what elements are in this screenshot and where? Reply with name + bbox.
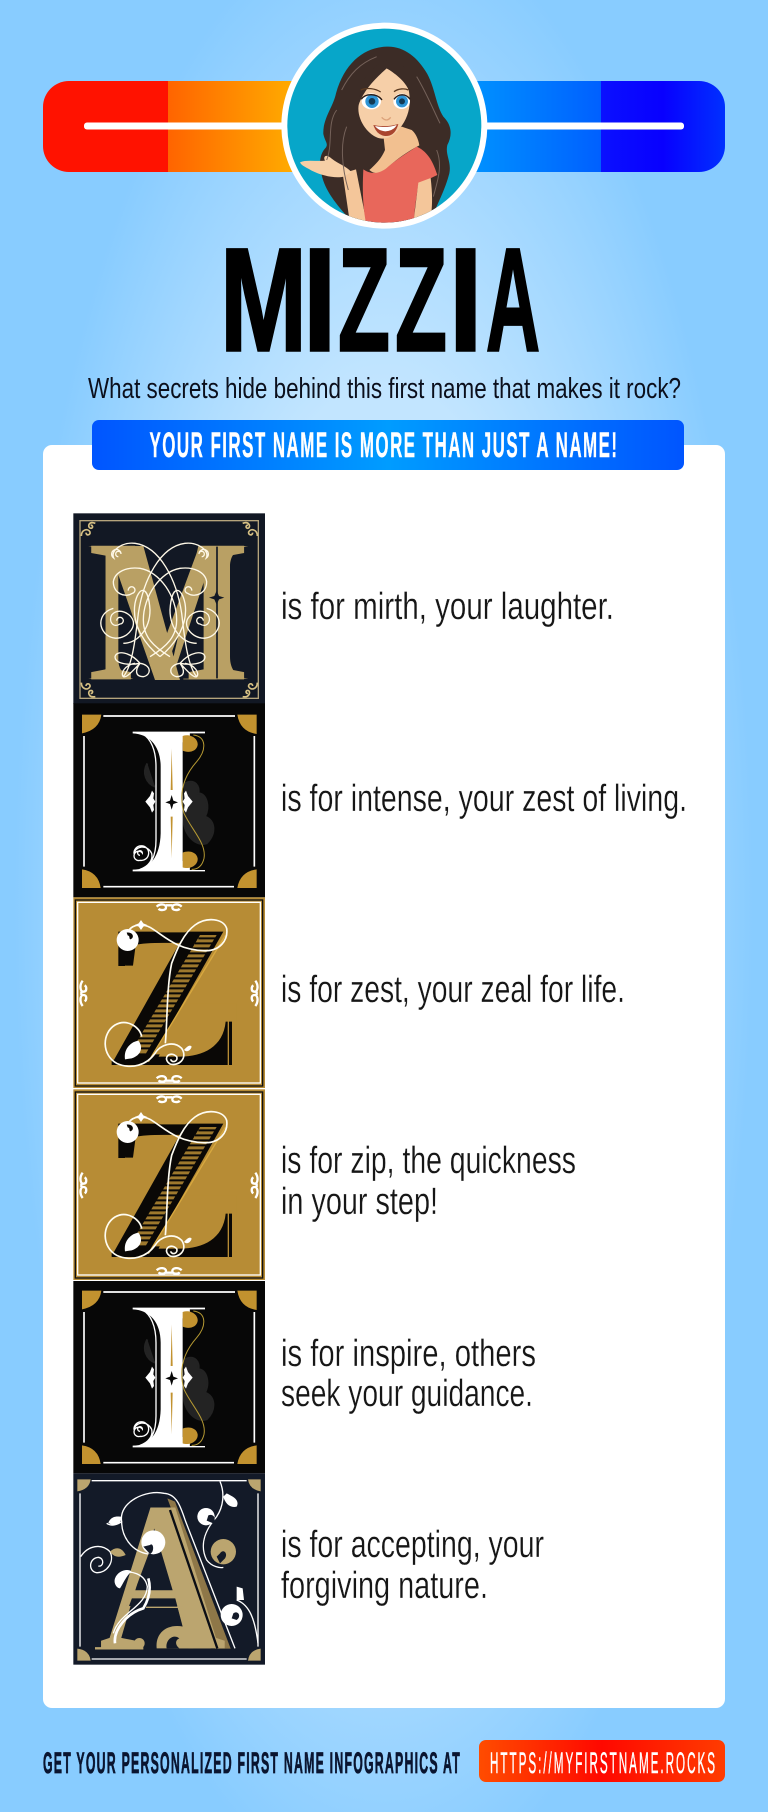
row 6 text: forgiving nature. (281, 1565, 488, 1607)
tile: letter M: M (88, 498, 249, 724)
title: MIZZIA: A (486, 218, 540, 382)
row 6 text (281, 1524, 544, 1607)
tile: letter I (second): I (150, 1259, 194, 1493)
row 4 text (281, 1140, 576, 1223)
row 5 text: is for inspire, others (281, 1333, 536, 1375)
row 4 text: in your step! (281, 1181, 438, 1223)
top colour bar (43, 81, 725, 172)
title: MIZZIA (220, 218, 540, 382)
row 6 text: is for accepting, your (281, 1524, 544, 1566)
title: MIZZIA: I (449, 218, 483, 382)
banner (92, 420, 684, 470)
footer url button (479, 1740, 725, 1782)
title: MIZZIA: M (220, 218, 307, 382)
tile: letter Z: Z (111, 885, 232, 1109)
row 4 text: is for zip, the quickness (281, 1140, 576, 1182)
row 5 text (281, 1333, 536, 1415)
title: MIZZIA: Z (395, 218, 447, 382)
tile: letter Z (second): Z (111, 1077, 232, 1301)
title: MIZZIA: I (303, 218, 337, 382)
row 3 text: is for zest, your zeal for life. (281, 969, 625, 1011)
tile: letter I (73, 683, 265, 917)
tile: letter A: A (99, 1459, 226, 1695)
portrait avatar (281, 23, 487, 229)
tile: letter I (second) (73, 1259, 265, 1493)
row 5 text: seek your guidance. (281, 1373, 533, 1415)
tile: letter I: I (150, 683, 194, 917)
title: MIZZIA: Z (338, 218, 390, 382)
row 1 text: is for mirth, your laughter. (281, 586, 614, 628)
panel: white card (43, 445, 725, 1708)
